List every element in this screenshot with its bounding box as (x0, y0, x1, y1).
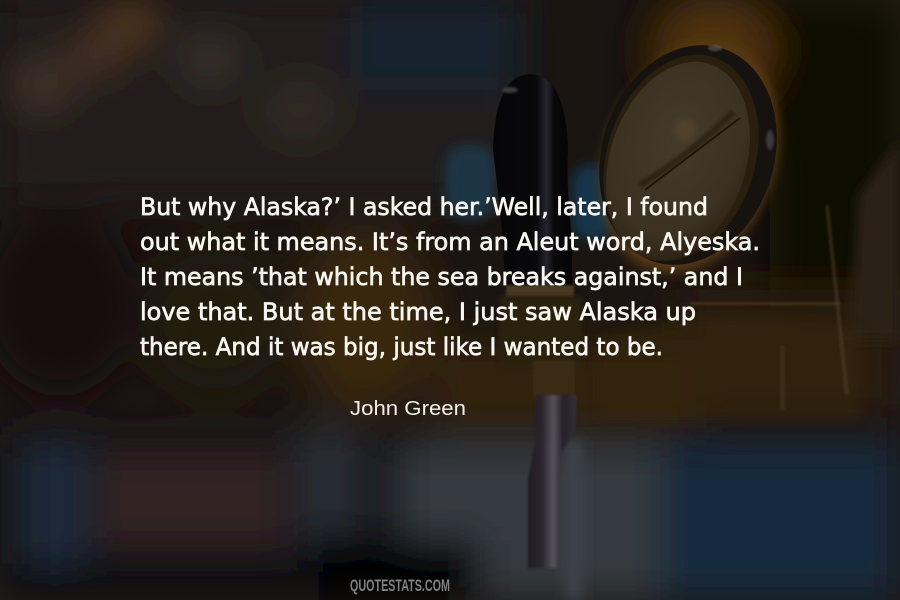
icon: metal tap spout (528, 360, 577, 568)
quote line 3: It means ’that which the sea breaks against,’ and I (140, 263, 743, 291)
quote line 4: love that. But at the time, I just saw Alaska up (140, 298, 696, 326)
quote line 1: But why Alaska?’ I asked her.’Well, later, I found (140, 193, 708, 221)
author name: John Green (350, 398, 466, 420)
icon: dark tap handle (493, 74, 582, 369)
watermark: QUOTESTATS.COM (350, 576, 450, 595)
quote line 5: there. And it was big, just like I wanted to be. (140, 333, 663, 361)
icon: right tap base (600, 140, 900, 420)
icon: beer tap badge (571, 18, 809, 298)
quote line 2: out what it means. It’s from an Aleut word, Alyeska. (140, 228, 760, 256)
icon: blurred blue lights behind tap (445, 145, 614, 600)
quote text (140, 193, 760, 361)
